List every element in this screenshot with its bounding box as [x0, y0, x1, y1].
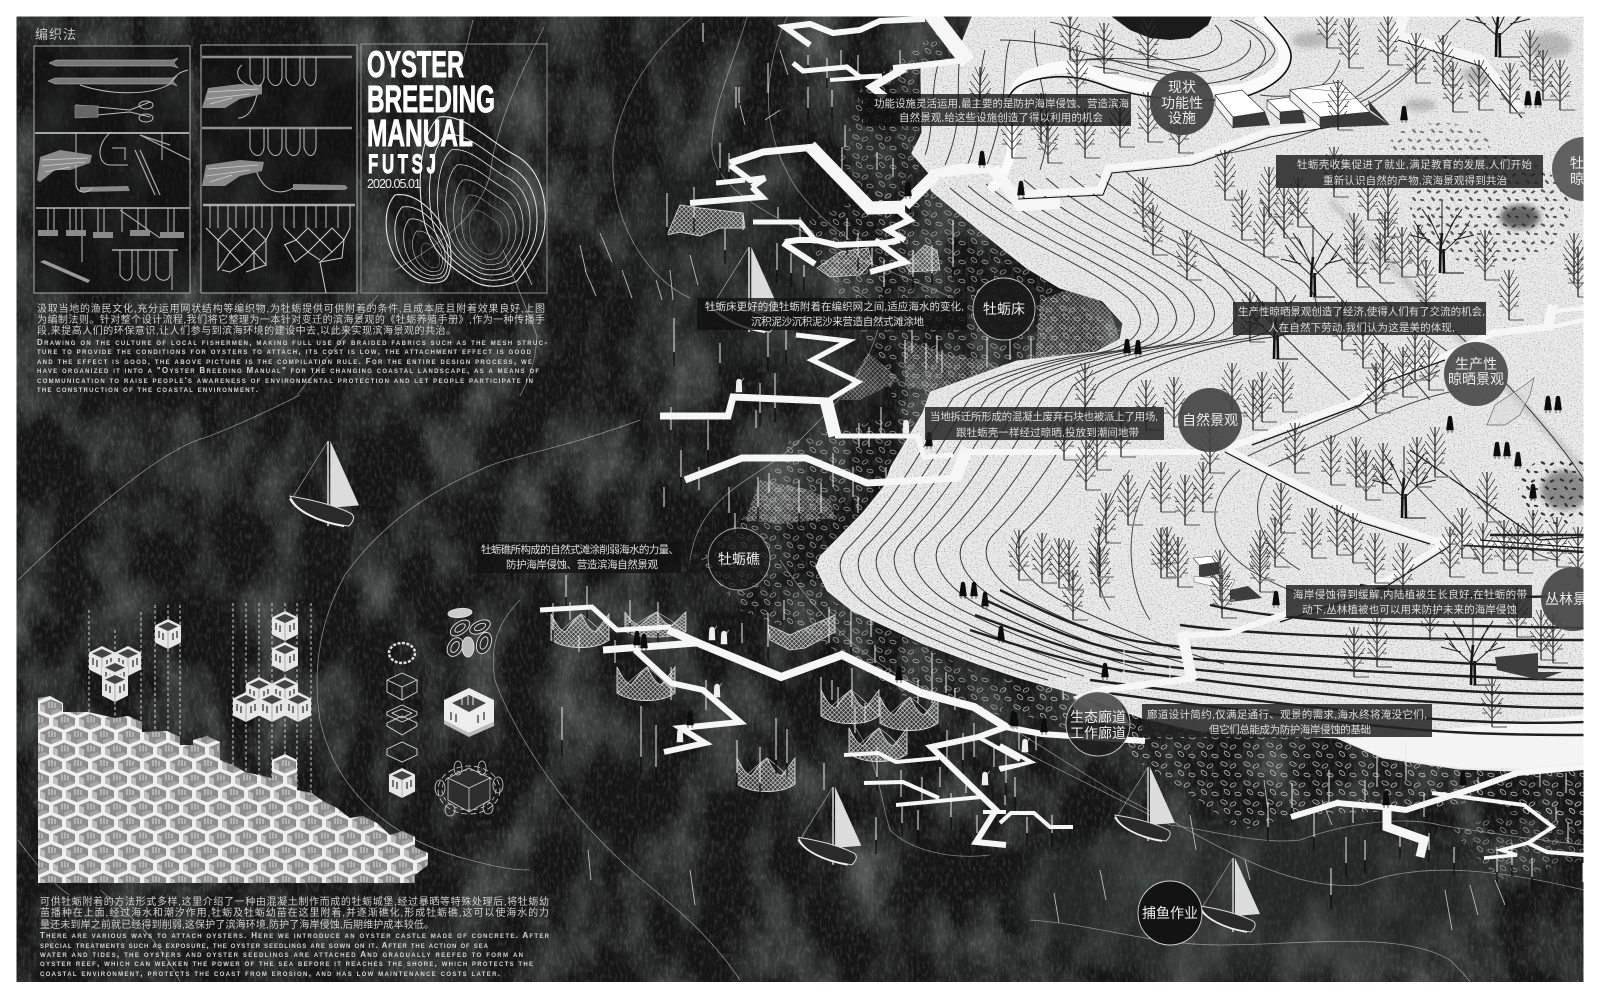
callout: erosion relieved	[1286, 585, 1532, 618]
buildings	[1193, 82, 1562, 680]
badge: oyster bed	[973, 278, 1035, 340]
lower paragraph English: water and tides, the oysters and oyster seedlings are attached And gradually reefed to form an	[40, 950, 523, 959]
callout: oyster reef: 防护海岸侵蚀、营造滨海自然景观	[506, 558, 658, 571]
lower paragraph English	[40, 931, 550, 978]
oyster shell icons	[444, 607, 494, 659]
drying net on ground	[1487, 378, 1534, 425]
large module render	[444, 688, 494, 737]
sailboats	[290, 247, 1260, 932]
module with oysters attached	[435, 761, 503, 816]
badge: natural landscape	[1178, 388, 1242, 452]
callout: functional facilities	[863, 94, 1131, 126]
title: oyster breeding manual	[367, 44, 495, 179]
oyster shell outline drawing	[386, 117, 545, 286]
badge: oyster reef	[708, 528, 770, 590]
callout: functional facilities: 自然景观,给这些设施创造了得以利用的机会	[899, 111, 1104, 124]
badge: natural landscape: 自然景观	[1182, 412, 1238, 428]
top dark inlet	[1111, 16, 1212, 40]
callout: oyster reef: 牡蛎礁所构成的自然式滩涂削弱海水的力量、	[481, 543, 679, 556]
intro paragraph Chinese	[37, 302, 545, 337]
callout: productive drying	[1233, 302, 1486, 335]
intro paragraph Chinese: 为编制法则。针对整个设计流程,我们将它整理为一本针对变迁的滨海景观的《牡蛎养殖手册》,作为一种传播手	[37, 313, 545, 326]
callout: oyster reef	[477, 542, 681, 573]
intro paragraph English: and the effect is good, the above picture is the compilation rule. For the entire design process, we	[37, 357, 532, 366]
title date: 2020.05.01	[367, 177, 421, 191]
lower paragraph Chinese: 苗播种在上面,经过海水和潮汐作用,牡蛎及牡蛎幼苗在这里附着,并逐渐礁化,形成牡蛎礁,这可以使海水的力	[40, 906, 549, 919]
callout: productive drying: 生产性晾晒景观创造了经济,使得人们有了交流的机会,	[1238, 305, 1485, 318]
badge: oyster bed: 牡蛎床	[983, 301, 1025, 317]
callout: erosion relieved: 海岸侵蚀得到缓解,内陆植被生长良好,在牡蛎的带	[1293, 588, 1527, 601]
badge: forest landscape	[1541, 567, 1600, 631]
callout: oyster bed: 沉积泥沙沉积泥沙来营造自然式滩涂地	[751, 315, 924, 328]
callout: corridors	[1142, 704, 1432, 737]
callout: oyster bed	[697, 298, 967, 330]
callout: corridors: 廊道设计简约,仅满足通行、观景的需求,海水终将淹没它们,	[1147, 708, 1427, 721]
badge: fishing: 捕鱼作业	[1142, 905, 1198, 921]
callout: concrete rubble	[925, 407, 1164, 440]
badge: oyster drying: 晾晒	[1570, 171, 1598, 187]
title: oyster breeding manual: BREEDING	[367, 79, 495, 121]
poles	[520, 23, 1583, 930]
boardwalks over water	[540, 12, 1584, 858]
callout: shell collection: 牡蛎壳收集促进了就业,满足教育的发展,人们开始	[1297, 158, 1532, 171]
lower paragraph English: There are various ways to attach oysters. Here we introduce an oyster castle made of concrete. After	[40, 931, 550, 940]
badge: existing functional facilities: 设施	[1168, 110, 1196, 126]
intro paragraph English	[37, 338, 547, 394]
contour lines	[840, 20, 1584, 680]
title: oyster breeding manual: OYSTER	[367, 44, 464, 85]
callout: erosion relieved: 动下,丛林植被也可以用来防护未来的海岸侵蚀	[1302, 603, 1518, 616]
badge: fishing	[1138, 881, 1202, 945]
lower paragraph Chinese: 量还未到岸之前就已经得到削弱,这保护了滨海环境,防护了海岸侵蚀,后期维护成本较低。	[40, 918, 434, 931]
title: oyster breeding manual: FUTSJ	[368, 149, 440, 179]
lower paragraph English: coastal environment, protects the coast from erosion, and has low maintenance costs later.	[40, 969, 500, 978]
lower paragraph English: special treatments such as exposure, the oyster seedlings are sown on it. After the action of sea	[40, 941, 489, 950]
callout: corridors: 但它们总能成为防护海岸侵蚀的基础	[1209, 723, 1371, 736]
intro paragraph Chinese: 汲取当地的渔民文化,充分运用网状结构等编织物,为牡蛎提供可供附着的条件,且成本底且附着效果良好,上图	[37, 302, 545, 315]
badge: eco corridor and work corridor: 工作廊道	[1070, 725, 1126, 741]
callout: functional facilities: 功能设施灵活运用,最主要的是防护海岸侵蚀、营造滨海	[874, 97, 1130, 110]
trees	[969, 0, 1593, 727]
callout: concrete rubble: 当地拆迁所形成的混凝土废弃石块也被派上了用场,	[930, 410, 1158, 423]
intro paragraph English: the construction of the coastal environment.	[37, 385, 258, 394]
boardwalks and roads on land	[930, 16, 1584, 713]
badge: oyster drying	[1552, 137, 1584, 201]
badge: productive drying landscape: 生产性	[1455, 356, 1497, 372]
woodcut plate 1	[34, 46, 190, 293]
people	[634, 91, 1562, 808]
fishing nets	[551, 205, 1120, 792]
intro paragraph English: communication to raise people's awareness of environmental protection and let people participate in	[37, 376, 533, 385]
badge: existing functional facilities	[1150, 71, 1214, 135]
callout: concrete rubble: 跟牡蛎壳一样经过晾晒,投放到潮间地带	[956, 426, 1139, 439]
intro paragraph English: Drawing on the culture of local fishermen, making full use of braided fabrics such as the mesh struc-	[37, 338, 547, 347]
land: coastal terrain	[810, 16, 1600, 776]
badge: forest landscape: 丛林景观	[1545, 591, 1600, 607]
thick lower contour bands	[970, 535, 1584, 735]
woodcut plate 2	[201, 45, 357, 293]
title frame	[361, 44, 547, 293]
badge: productive drying landscape: 晾晒景观	[1448, 371, 1504, 387]
oyster scatter fields	[700, 30, 1584, 880]
badge: existing functional facilities: 现状	[1168, 79, 1196, 95]
lower paragraph Chinese: 可供牡蛎附着的方法形式多样,这里介绍了一种由混凝土制作而成的牡蛎城堡,经过暴晒等特殊处理后,将牡蛎幼	[40, 895, 549, 908]
intro paragraph English: have organized it into a "Oyster Breeding Manual" for the changing coastal landscape, as a means of	[37, 366, 539, 375]
canopy shading	[1292, 32, 1572, 111]
intro paragraph English: ture to provide the conditions for oysters to attach, its cost is low, the attachment effect is good	[37, 347, 532, 356]
dashed assembly guide lines	[89, 603, 311, 793]
module breakdown components	[387, 643, 417, 798]
badge: eco corridor and work corridor: 生态廊道	[1070, 709, 1126, 725]
badge: oyster drying: 牡蛎	[1570, 155, 1598, 171]
intro paragraph Chinese: 段,来提高人们的环保意识,让人们参与到滨海环境的建设中去,以此来实现滨海景观的共治。	[37, 324, 456, 337]
oyster castle honeycomb block	[38, 696, 428, 883]
title: oyster breeding manual: MANUAL	[367, 113, 473, 155]
lower paragraph English: oyster reef, which can weaken the power of the sea before it reaches the shore, which protects the	[40, 959, 533, 968]
badge: existing functional facilities: 功能性	[1161, 95, 1203, 111]
callout: shell collection: 重新认识自然的产物,滨海景观得到共治	[1323, 174, 1507, 187]
floating hex modules	[89, 611, 311, 722]
callout: shell collection	[1276, 155, 1543, 188]
badge: productive drying landscape	[1444, 342, 1508, 406]
badge: eco corridor and work corridor	[1066, 692, 1130, 756]
callout: productive drying: 人在自然下劳动,我们认为这是美的体现,	[1268, 321, 1455, 334]
badge: oyster reef: 牡蛎礁	[718, 551, 760, 567]
callout: oyster bed: 牡蛎床更好的使牡蛎附着在编织网之间,适应海水的变化,	[705, 300, 964, 313]
lower paragraph Chinese	[40, 895, 549, 931]
heading: weaving method: 编织法	[35, 27, 76, 42]
